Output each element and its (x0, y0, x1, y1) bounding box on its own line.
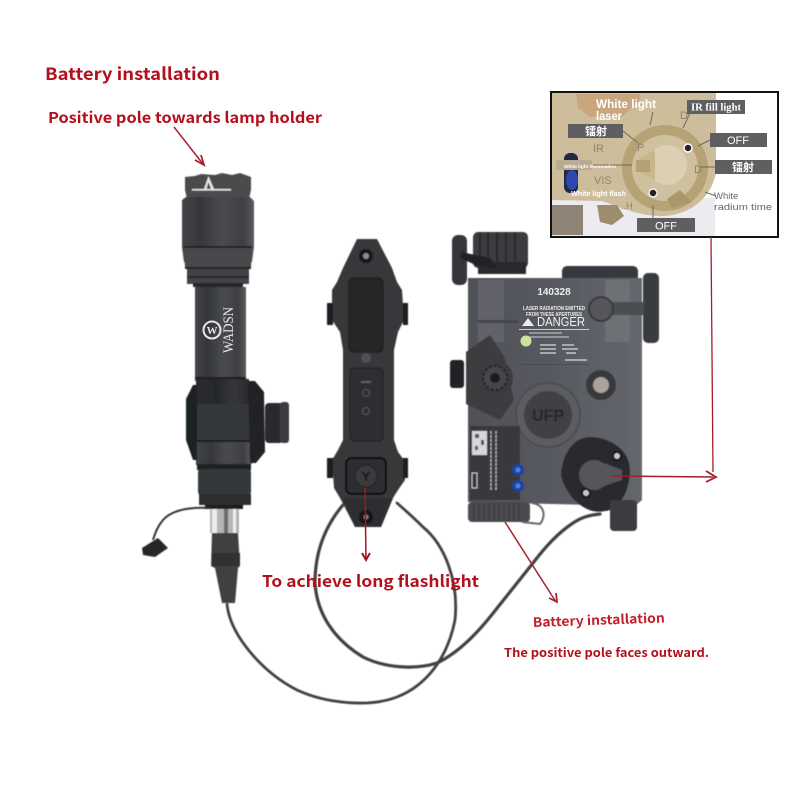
main body (468, 278, 642, 506)
leader lines (584, 112, 716, 218)
label: white light illumination (556, 160, 616, 170)
left knob (452, 235, 467, 285)
bottom grip (552, 205, 583, 235)
side panel shading (478, 280, 504, 342)
dial letters: D (680, 110, 688, 122)
arrow: battery compartment (505, 522, 557, 602)
dial letters: D (694, 164, 702, 176)
label: white light laser (596, 99, 656, 123)
inset: dial mode diagram (551, 92, 778, 237)
danger label: LASER RADIATION EMITTED (523, 306, 585, 312)
cable from pressure switch to laser box (315, 505, 600, 667)
right adjustment screw (586, 370, 616, 400)
flashlight logo mark (192, 176, 231, 190)
dial letters: IR (593, 143, 604, 155)
label: white light laser: laser (596, 111, 623, 123)
label: white radium time: radium time (714, 202, 772, 213)
danger label (519, 306, 589, 365)
long cable loop from flashlight (227, 503, 456, 703)
flashlight branding (204, 307, 237, 353)
label: laser right: 镭射 (732, 160, 754, 174)
dial letters: P (637, 142, 644, 154)
QR sticker (470, 426, 520, 500)
inset border (551, 92, 778, 237)
top knob (473, 232, 528, 268)
dial letters: ..H (621, 201, 633, 211)
upper button (349, 278, 383, 352)
centre stud (361, 353, 371, 363)
pressure switch: Y (362, 469, 371, 484)
end button (346, 458, 386, 494)
label: white light flash: White light flash (571, 189, 626, 198)
mode dial (561, 437, 630, 512)
text: to achieve long flashlight: To achieve long flashlight (262, 568, 479, 592)
cable port (610, 500, 637, 531)
bottom battery knob (468, 502, 530, 522)
metal connector (210, 509, 239, 533)
bottom plate (343, 498, 393, 527)
flashlight body tube (195, 287, 246, 381)
inset background (552, 93, 777, 236)
label: laser right (715, 160, 772, 174)
dust cap tether (153, 508, 210, 540)
danger label: FROM THESE APERTURES (526, 312, 583, 318)
flashlight head crown (185, 173, 251, 199)
side loop (522, 503, 544, 524)
battery cap logo (516, 383, 580, 447)
blue switch (564, 153, 578, 193)
laser box label text (519, 287, 589, 365)
bottom screw (359, 510, 373, 524)
label: IR fill light: IR fill light (691, 102, 742, 114)
label: IR fill light (687, 100, 745, 114)
arrow: end button (362, 488, 370, 560)
flashlight lower body (196, 379, 249, 465)
label: OFF right (710, 133, 767, 147)
label: OFF bottom (637, 218, 695, 232)
emblem corner (576, 94, 640, 117)
label: white radium time (714, 191, 772, 213)
flashlight ring (184, 246, 252, 248)
WADSN wordmark: WADSN (221, 307, 237, 353)
pressure switch (327, 239, 408, 527)
mount thumb screw (265, 403, 283, 443)
lower button (350, 368, 383, 441)
laser box (450, 232, 659, 531)
dial (622, 125, 708, 211)
top screw (359, 249, 373, 263)
text: positive pole towards lamp holder: Positive pole towards lamp holder (48, 107, 322, 128)
label: OFF right: OFF (727, 135, 749, 147)
label: OFF bottom: OFF (655, 220, 677, 232)
serial number: 140328 (537, 287, 571, 298)
housing (552, 93, 716, 216)
dial letters (593, 110, 702, 211)
flashlight mount clamp (186, 385, 197, 460)
label: white light illumination: White light illumination (564, 164, 616, 169)
text: positive pole faces outward: The positive pole faces outward. (504, 644, 709, 661)
WADSN logo circle (204, 322, 220, 338)
label: white radium time: White (714, 191, 738, 202)
rail thumb screw (589, 297, 613, 321)
label: laser left (568, 124, 623, 138)
laser box: UFP (532, 406, 564, 425)
danger label: DANGER (537, 314, 585, 329)
arrow: lamp holder (174, 127, 204, 165)
battery cap (562, 266, 638, 282)
right knob (643, 273, 659, 343)
rubber plug (211, 533, 240, 603)
heading: battery installation: Battery installation (45, 60, 220, 85)
arrow: inset to dial (612, 237, 716, 482)
left side fin and focus wheel (466, 335, 514, 420)
flashlight (142, 173, 289, 603)
dial letters: VIS (594, 175, 612, 187)
flashlight branding: W (206, 325, 218, 337)
label: white light laser: White light (596, 99, 656, 111)
label: laser left: 镭射 (585, 124, 607, 138)
switch body (332, 239, 405, 527)
tail cap (197, 464, 251, 470)
text: battery installation lower: Battery installation (532, 607, 665, 631)
cables (227, 503, 600, 703)
side tabs (327, 303, 333, 325)
blue buttons (512, 464, 524, 476)
flashlight bezel (182, 197, 254, 262)
